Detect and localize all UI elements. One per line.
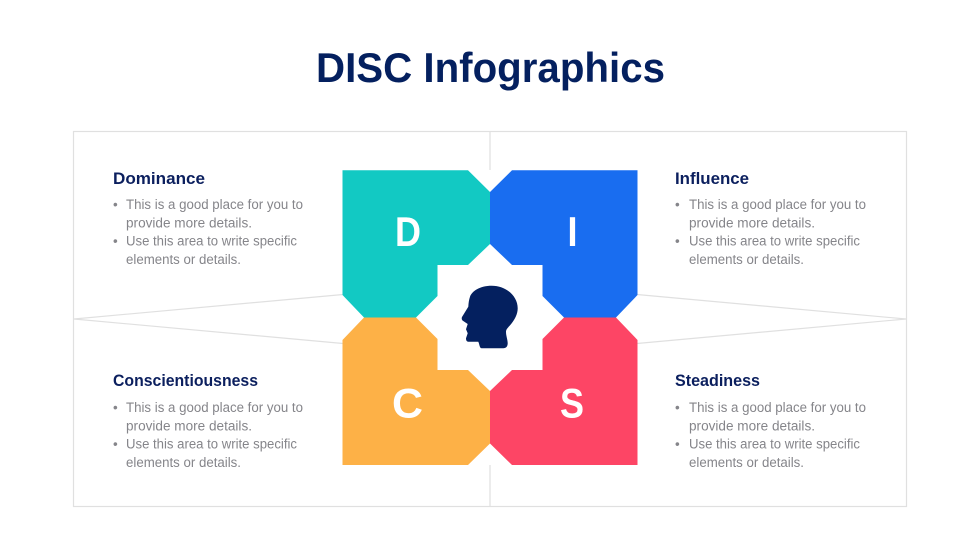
panel: Dominance text: provide more details.: [126, 216, 252, 230]
quadrant: C orange: [342, 318, 490, 465]
panel: Steadiness text: •: [675, 436, 680, 452]
panel: Conscientiousness text: •: [113, 400, 118, 415]
panel: Dominance text: Use this area to write specific: [126, 234, 297, 248]
panel: Steadiness text: provide more details.: [689, 418, 815, 434]
panel: Conscientiousness text: provide more details.: [126, 418, 252, 434]
quadrant: C orange: C: [392, 380, 423, 426]
title: DISC Infographics: [316, 44, 665, 91]
panel: Steadiness text: [675, 371, 866, 470]
panel: Influence text: Influence: [675, 169, 749, 188]
panel: Influence text: •: [675, 234, 680, 248]
panel: Influence text: provide more details.: [689, 216, 815, 230]
panel: Influence text: elements or details.: [689, 252, 804, 267]
panel: Dominance text: •: [113, 234, 118, 248]
panel: Steadiness text: Steadiness: [675, 371, 760, 390]
panel: Influence text: [675, 169, 866, 267]
panel: Dominance text: Dominance: [113, 169, 205, 188]
icon: head silhouette: [462, 286, 518, 348]
panel: Conscientiousness text: elements or details.: [126, 455, 241, 470]
quadrant: I blue: [490, 170, 638, 318]
panel: Influence text: This is a good place for you to: [689, 197, 866, 212]
quadrant: D teal: D: [395, 208, 421, 255]
panel: Conscientiousness text: Use this area to write specific: [126, 436, 297, 452]
panel: Conscientiousness text: [113, 371, 303, 470]
quadrant: D teal: [342, 170, 490, 318]
panel: Influence text: Use this area to write specific: [689, 234, 860, 248]
panel: Steadiness text: Use this area to write specific: [689, 436, 860, 452]
panel: Steadiness text: This is a good place for you to: [689, 400, 866, 415]
outer frame with connector lines: [74, 131, 906, 507]
quadrant: S red: [490, 318, 638, 465]
panel: Influence text: •: [675, 197, 680, 212]
panel: Dominance text: [113, 169, 303, 267]
panel: Steadiness text: •: [675, 400, 680, 415]
panel: Dominance text: This is a good place for you to: [126, 197, 303, 212]
quadrant: I blue: I: [568, 208, 578, 255]
panel: Conscientiousness text: Conscientiousness: [113, 371, 258, 390]
panel: Dominance text: •: [113, 197, 118, 212]
quadrant: S red: S: [560, 380, 584, 426]
panel: Dominance text: elements or details.: [126, 252, 241, 267]
panel: Conscientiousness text: This is a good place for you to: [126, 400, 303, 415]
panel: Steadiness text: elements or details.: [689, 455, 804, 470]
panel: Conscientiousness text: •: [113, 436, 118, 452]
